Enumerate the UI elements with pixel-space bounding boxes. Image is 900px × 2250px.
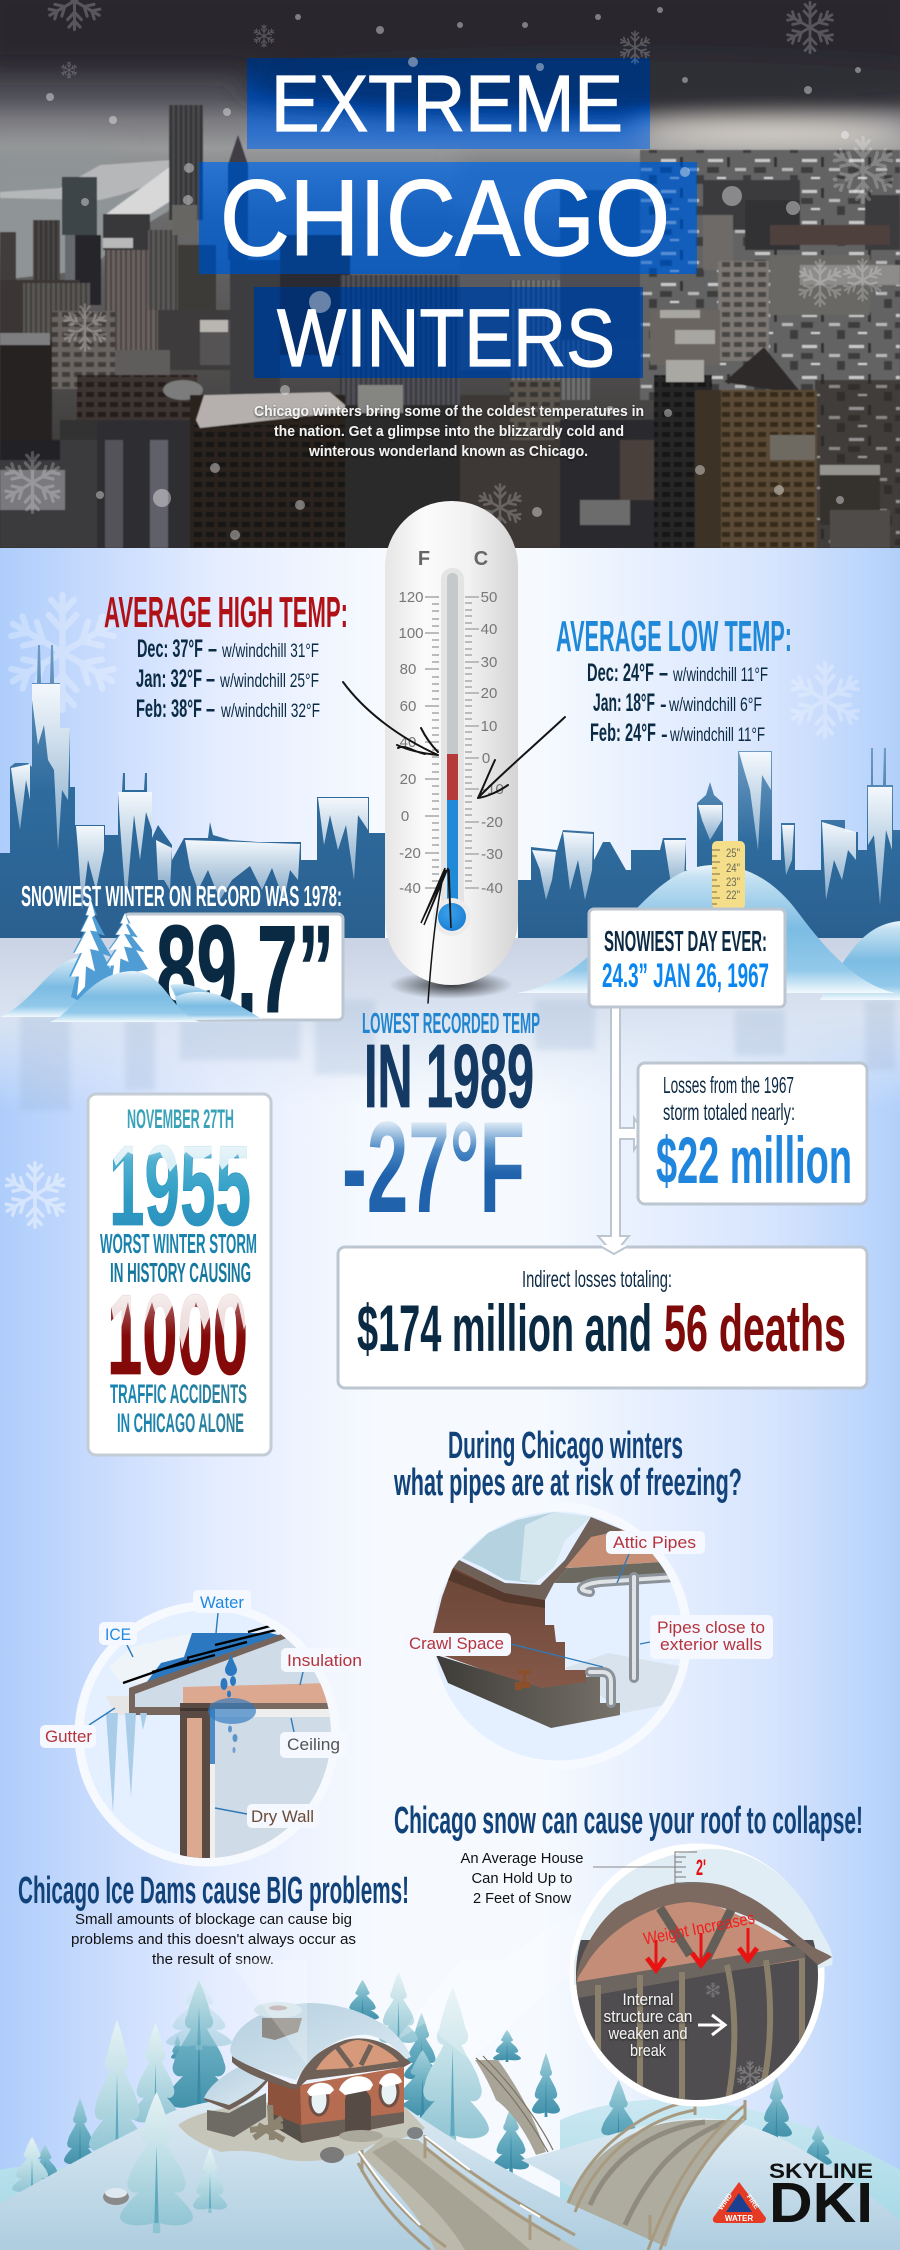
title: WINTERS: WINTERS: [277, 293, 615, 384]
average high temp: w/windchill 31°F: [221, 641, 319, 662]
header snowfall: [46, 7, 861, 540]
label: ceiling: Ceiling: [287, 1735, 340, 1754]
label: crawl space: Crawl Space: [409, 1634, 504, 1653]
average low temp: Jan: 18°F: [593, 689, 655, 717]
thermometer: 120: [398, 589, 424, 606]
average house snow load: 2 Feet of Snow: [473, 1890, 571, 1907]
label: internal structure: [604, 1990, 692, 2060]
snow depth ruler: 24": [726, 861, 740, 875]
thermometer: 100: [398, 625, 424, 642]
logo: Skyline DKI: FIRE: [745, 2194, 760, 2211]
red weight arrows: [647, 1928, 757, 1970]
header snowflakes: [3, 0, 895, 531]
far road: [475, 2060, 546, 2155]
page background: [0, 548, 900, 2250]
label: internal structure: Internal: [622, 1990, 674, 2009]
average low temp: –: [659, 659, 668, 687]
right distant city: [640, 150, 900, 400]
label: ice: [99, 1622, 137, 1645]
icon: white arrow right: [698, 2015, 725, 2035]
label: water: [193, 1590, 251, 1613]
ice dams body text: [71, 1911, 356, 1968]
label: insulation: [281, 1648, 367, 1672]
thermometer: 40: [400, 734, 416, 751]
ground and reflection: [0, 938, 900, 1110]
right snow hills: [517, 865, 900, 1000]
average high temp: AVERAGE HIGH TEMP:: [104, 588, 348, 637]
struts: [660, 1908, 732, 1962]
thermometer: 0: [482, 750, 490, 767]
thermometer: -20: [399, 845, 421, 862]
callout: losses 22 million: storm totaled nearly:: [663, 1099, 795, 1125]
average high temp: [104, 588, 348, 723]
label: internal structure: structure can: [604, 2007, 692, 2026]
average high temp: Jan: 32°F: [136, 665, 202, 693]
average high temp: –: [206, 665, 215, 693]
callout: 89.7 inches: [124, 901, 343, 1039]
label: internal structure: weaken and: [608, 2024, 688, 2043]
callout: snowiest day: [589, 909, 785, 1007]
thermometer: 40: [481, 621, 497, 638]
Celsius ticks: [465, 597, 479, 888]
average high temp: –: [206, 695, 215, 723]
panel: 1955 storm: WORST WINTER STORM: [100, 1228, 257, 1259]
average high temp: Dec: 37°F: [137, 635, 203, 663]
label: pipes close to exterior walls: exterior walls: [660, 1635, 762, 1654]
title: CHICAGO: CHICAGO: [220, 157, 670, 278]
callout: snowiest day: 24.3” JAN 26, 1967: [602, 957, 769, 995]
panel: 1955 storm: 1000: [107, 1272, 248, 1399]
thermometer: 30: [481, 654, 497, 671]
label: attic pipes: [606, 1531, 705, 1554]
thermometer: -20: [481, 814, 503, 831]
lower city: [60, 420, 100, 548]
beige clearing around house: [178, 2100, 425, 2161]
average low temp: Feb: 24°F: [590, 719, 656, 747]
logo: Skyline DKI: WIND: [718, 2192, 734, 2212]
thermometer: 20: [481, 685, 497, 702]
hills: [521, 2118, 900, 2250]
winter landscape with house: [0, 1870, 900, 2250]
title: EXTREME: EXTREME: [271, 59, 623, 148]
diagram: freezing pipes cutaway: [402, 1507, 773, 1765]
towers left: [169, 105, 203, 220]
label: gutter: [40, 1725, 96, 1748]
label: pipes close to exterior walls: [650, 1615, 773, 1659]
average low temp: Dec: 24°F: [587, 659, 654, 687]
average house snow load: 2': [696, 1855, 706, 1880]
roads and fences: [362, 2137, 580, 2250]
label: gutter: Gutter: [45, 1727, 92, 1746]
average high temp: w/windchill 32°F: [220, 701, 320, 722]
average low temp: w/windchill 11°F: [672, 665, 768, 686]
callout: indirect losses: $174 million and: [357, 1291, 652, 1365]
F and C scale letters: [418, 548, 488, 570]
hand drawn arrow to average low: [478, 717, 565, 798]
skyline right with ice: [518, 748, 900, 938]
label: weight increases: Weight Increases: [642, 1908, 756, 1949]
thermometer: 0: [401, 808, 409, 825]
intro text: Chicago winters bring some of the coldest temperatures in: [254, 404, 644, 420]
thermometer: -40: [399, 880, 421, 897]
snow depth ruler: 23": [726, 875, 740, 889]
intro text: winterous wonderland known as Chicago.: [308, 444, 588, 460]
average house snow load: An Average House: [460, 1850, 584, 1867]
label: dry wall: [247, 1804, 319, 1828]
callout: losses 22 million: [638, 1063, 867, 1204]
house: [103, 2002, 423, 2205]
panel: 1955 storm: TRAFFIC ACCIDENTS: [110, 1379, 247, 1409]
thermometer: 10: [481, 718, 497, 735]
average high temp: –: [208, 635, 217, 663]
far hills: [0, 2099, 900, 2250]
diagram: roof collapse cutaway: [570, 1845, 833, 2110]
average high temp: Feb: 38°F: [136, 695, 202, 723]
F and C scale letters: F: [418, 548, 430, 570]
callout: losses 22 million: Losses from the 1967: [663, 1072, 794, 1098]
heading: pipes at risk: During Chicago winters: [448, 1425, 683, 1467]
Fahrenheit ticks: [425, 597, 439, 888]
panel: 1955 storm: 1955: [109, 1123, 251, 1250]
faucet: [515, 1670, 530, 1690]
thermometer: [385, 501, 518, 999]
average house snow load: [460, 1850, 706, 1907]
average low temp: -: [661, 724, 668, 746]
label: internal structure: break: [630, 2041, 666, 2060]
callout: 89.7 inches: 89.7”: [156, 901, 334, 1039]
heading: ice dams: Chicago Ice Dams cause BIG problems!: [18, 1870, 409, 1912]
average house snow load: Can Hold Up to: [472, 1870, 572, 1887]
panel: 1955 storm: NOVEMBER 27TH: [127, 1104, 234, 1134]
skyline left with ice: [0, 645, 385, 938]
panel: 1955 storm: [88, 1094, 271, 1455]
hand drawn arrow to average high: [343, 682, 438, 755]
diagram: ice dam cutaway: [40, 1590, 367, 1863]
label: water: Water: [200, 1593, 244, 1612]
F and C scale letters: C: [474, 548, 488, 570]
hand drawn arrow to lowest temp: [421, 868, 451, 1003]
background trees: [12, 1972, 832, 2195]
left lake and shoreline: [0, 188, 170, 279]
fences: [358, 2095, 745, 2250]
ice dams body text: Small amounts of blockage can cause big: [75, 1911, 352, 1928]
snow depth ruler: 22": [726, 888, 740, 902]
foreground trees: [120, 2092, 227, 2233]
logo: Skyline DKI: SKYLINE: [769, 2160, 873, 2183]
thermometer: 50: [481, 589, 497, 606]
average high temp: w/windchill 25°F: [219, 671, 319, 692]
thermometer: 20: [400, 771, 416, 788]
label: dry wall: Dry Wall: [251, 1807, 314, 1826]
thermometer: 60: [400, 698, 416, 715]
label: pipes close to exterior walls: Pipes close to: [657, 1618, 765, 1637]
heading: pipes at risk: [393, 1425, 742, 1504]
thermometer: -10: [482, 781, 504, 798]
lowest recorded temp: [342, 1008, 540, 1240]
header photo: snowy Chicago skyline: [0, 0, 900, 548]
text: LOWEST RECORDED TEMP: [362, 1008, 540, 1040]
label: ceiling: [280, 1732, 347, 1758]
intro text: the nation. Get a glimpse into the blizzardly cold and: [274, 424, 624, 440]
panel: 1955 storm: IN HISTORY CAUSING: [110, 1257, 251, 1288]
thermometer: -30: [481, 846, 503, 863]
label: attic pipes: Attic Pipes: [613, 1533, 696, 1552]
intro text: [254, 404, 644, 460]
ice dams body text: problems and this doesn't always occur as: [71, 1931, 356, 1948]
callout: indirect losses: [338, 1245, 867, 1388]
lowest recorded temp: -27°F: [342, 1094, 525, 1240]
heading: snowiest winter: SNOWIEST WINTER ON RECORD WAS 1978:: [21, 881, 342, 913]
pipes: [582, 1576, 690, 1703]
faint light rays: [228, 1870, 690, 2065]
flow arrow from snowiest day box: [598, 1000, 645, 1254]
average low temp: w/windchill 11°F: [669, 725, 765, 746]
logo: Skyline DKI: WATER: [725, 2214, 753, 2223]
snow depth ruler: [712, 841, 745, 909]
lowest recorded temp: IN 1989: [364, 1027, 534, 1127]
average low temp: w/windchill 6°F: [668, 695, 762, 716]
snow depth ruler: 25": [726, 846, 740, 860]
thermometer: 80: [400, 661, 416, 678]
panel: 1955 storm: IN CHICAGO ALONE: [117, 1408, 244, 1438]
title banners, blue tinted panels: [199, 58, 697, 378]
label: ice: ICE: [105, 1625, 131, 1644]
ice dams body text: the result of snow.: [152, 1951, 274, 1968]
average low temp: -: [660, 694, 667, 716]
thermometer: -40: [481, 880, 503, 897]
logo: Skyline DKI: [713, 2160, 873, 2235]
label: insulation: Insulation: [287, 1651, 362, 1670]
callout: indirect losses: Indirect losses totaling:: [522, 1266, 672, 1292]
logo: Skyline DKI: DKI: [769, 2171, 873, 2235]
center: [230, 260, 280, 400]
average low temp: [556, 612, 792, 747]
left snow hills with trees: [0, 900, 262, 1022]
